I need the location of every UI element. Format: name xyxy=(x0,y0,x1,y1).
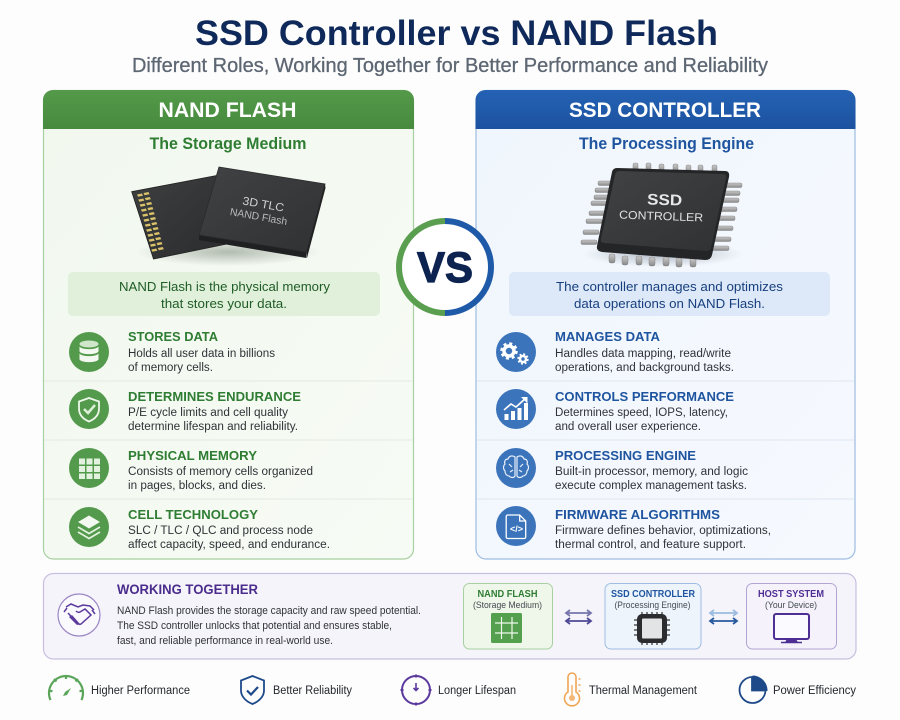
panel header: SSD CONTROLLER xyxy=(569,99,761,122)
row: processing engine xyxy=(496,448,748,492)
row: determines endurance: DETERMINES ENDURANCE xyxy=(128,389,301,404)
row dividers xyxy=(477,381,854,499)
icon: shield xyxy=(69,389,109,429)
working together description xyxy=(117,605,421,647)
card: SSD controller xyxy=(605,584,701,649)
chip pins xyxy=(581,163,742,267)
benefit: thermal management: Thermal Management xyxy=(589,685,698,697)
title: SSD Controller vs NAND Flash xyxy=(195,14,718,53)
row: stores data: Holds all user data in billions xyxy=(128,348,275,360)
card: host system xyxy=(746,584,836,649)
working together heading: WORKING TOGETHER xyxy=(117,582,258,597)
icon: memory grid xyxy=(69,448,109,488)
row: stores data xyxy=(69,329,275,374)
callout: controller definition xyxy=(509,272,830,316)
row: determines endurance: P/E cycle limits and cell quality xyxy=(128,407,288,419)
icon: gauge xyxy=(49,676,83,700)
icon: code file xyxy=(496,506,536,546)
row: manages data xyxy=(496,329,734,374)
row: controls performance xyxy=(496,389,734,433)
callout: NAND definition: NAND Flash is the physical memory xyxy=(119,279,331,294)
icon: rising chart xyxy=(496,389,536,429)
row: cell technology xyxy=(69,507,330,551)
row: stores data: STORES DATA xyxy=(128,329,219,344)
image: controller chip xyxy=(581,163,743,267)
row: controls performance: CONTROLS PERFORMANCE xyxy=(555,389,734,404)
card: host system: HOST SYSTEM xyxy=(758,589,824,600)
panel header xyxy=(43,90,414,129)
image: controller chip: CONTROLLER xyxy=(619,210,703,224)
row: stores data: of memory cells. xyxy=(128,362,213,374)
image: controller chip: SSD xyxy=(647,192,682,209)
working together description: fast, and reliable performance in real-world use. xyxy=(117,635,333,647)
icon: pie chart xyxy=(740,676,768,703)
row: firmware algorithms xyxy=(496,506,771,551)
row: cell technology: affect capacity, speed, and endurance. xyxy=(128,539,330,551)
card: NAND flash: NAND FLASH xyxy=(478,589,538,600)
row: processing engine: execute complex management tasks. xyxy=(555,480,747,492)
benefit: higher performance: Higher Performance xyxy=(91,685,190,697)
card: host system: (Your Device) xyxy=(765,600,817,611)
benefit: power efficiency: Power Efficiency xyxy=(773,685,856,697)
icon: shield check xyxy=(241,676,264,704)
benefit: higher performance xyxy=(49,676,190,700)
benefit: power efficiency xyxy=(740,676,856,703)
icon: thermometer xyxy=(565,673,580,706)
panel header xyxy=(476,90,856,129)
subtitle: Different Roles, Working Together for Better Performance and Reliability xyxy=(132,55,768,77)
VS badge: VS xyxy=(417,244,473,292)
panel: working together xyxy=(44,574,856,659)
image: NAND flash chips xyxy=(132,167,326,266)
icon: code file: </> xyxy=(510,524,523,534)
row: controls performance: Determines speed, IOPS, latency, xyxy=(555,407,728,419)
row: processing engine: Built-in processor, memory, and logic xyxy=(555,466,748,478)
icon: database xyxy=(69,332,109,372)
row: manages data: MANAGES DATA xyxy=(555,329,661,344)
callout: NAND definition: that stores your data. xyxy=(161,296,287,311)
icon: gears xyxy=(496,332,536,372)
row: physical memory: PHYSICAL MEMORY xyxy=(128,448,257,463)
arrows: NAND to controller xyxy=(566,610,591,624)
panel header: NAND FLASH xyxy=(158,99,296,122)
row: controls performance: and overall user experience. xyxy=(555,421,701,433)
row: determines endurance xyxy=(69,389,301,433)
icon: flash grid xyxy=(491,613,522,643)
row: cell technology: CELL TECHNOLOGY xyxy=(128,507,258,522)
image: NAND flash chips: NAND Flash xyxy=(229,206,288,228)
row: manages data: operations, and background tasks. xyxy=(555,362,734,374)
panel background xyxy=(44,574,856,659)
panel background xyxy=(44,90,414,559)
callout: controller definition: data operations on NAND Flash. xyxy=(574,296,765,311)
row: physical memory: in pages, blocks, and dies. xyxy=(128,480,266,492)
panel background xyxy=(476,90,855,559)
benefit: better reliability: Better Reliability xyxy=(273,685,352,697)
arrows: controller to host xyxy=(710,610,737,624)
icon: brain xyxy=(496,448,536,488)
callout: controller definition: The controller manages and optimizes xyxy=(556,279,784,294)
row dividers xyxy=(44,381,413,499)
benefit: longer lifespan xyxy=(400,674,516,706)
row: determines endurance: determine lifespan and reliability. xyxy=(128,421,298,433)
icon: monitor xyxy=(774,614,809,642)
icon: layers xyxy=(69,507,109,547)
icon: mini chip xyxy=(634,612,670,645)
row: manages data: Handles data mapping, read/write xyxy=(555,348,731,360)
row: firmware algorithms: thermal control, and feature support. xyxy=(555,539,746,551)
callout: NAND definition xyxy=(68,272,380,316)
panel subheading: The Processing Engine xyxy=(579,135,754,153)
row: firmware algorithms: FIRMWARE ALGORITHMS xyxy=(555,507,720,522)
image: NAND flash chips: 3D TLC xyxy=(241,195,285,215)
card: NAND flash xyxy=(464,584,552,649)
VS badge xyxy=(399,221,491,313)
icon: handshake xyxy=(58,594,100,636)
panel: SSD Controller xyxy=(476,90,856,559)
panel: NAND Flash xyxy=(43,90,414,559)
working together description: The SSD controller unlocks that potential and ensures stable, xyxy=(117,620,392,632)
card: NAND flash: (Storage Medium) xyxy=(473,600,542,611)
row: physical memory xyxy=(69,448,313,492)
card: SSD controller: SSD CONTROLLER xyxy=(611,589,696,600)
panel subheading: The Storage Medium xyxy=(150,135,306,153)
row: physical memory: Consists of memory cells organized xyxy=(128,466,313,478)
benefit: thermal management xyxy=(565,673,698,706)
row: cell technology: SLC / TLC / QLC and process node xyxy=(128,525,313,537)
benefit: longer lifespan: Longer Lifespan xyxy=(438,685,516,697)
working together description: NAND Flash provides the storage capacity and raw speed potential. xyxy=(117,605,421,617)
card: SSD controller: (Processing Engine) xyxy=(614,600,690,611)
row: firmware algorithms: Firmware defines behavior, optimizations, xyxy=(555,525,771,537)
icon: clock xyxy=(400,674,432,706)
row: processing engine: PROCESSING ENGINE xyxy=(555,448,696,463)
benefit: better reliability xyxy=(241,676,352,704)
